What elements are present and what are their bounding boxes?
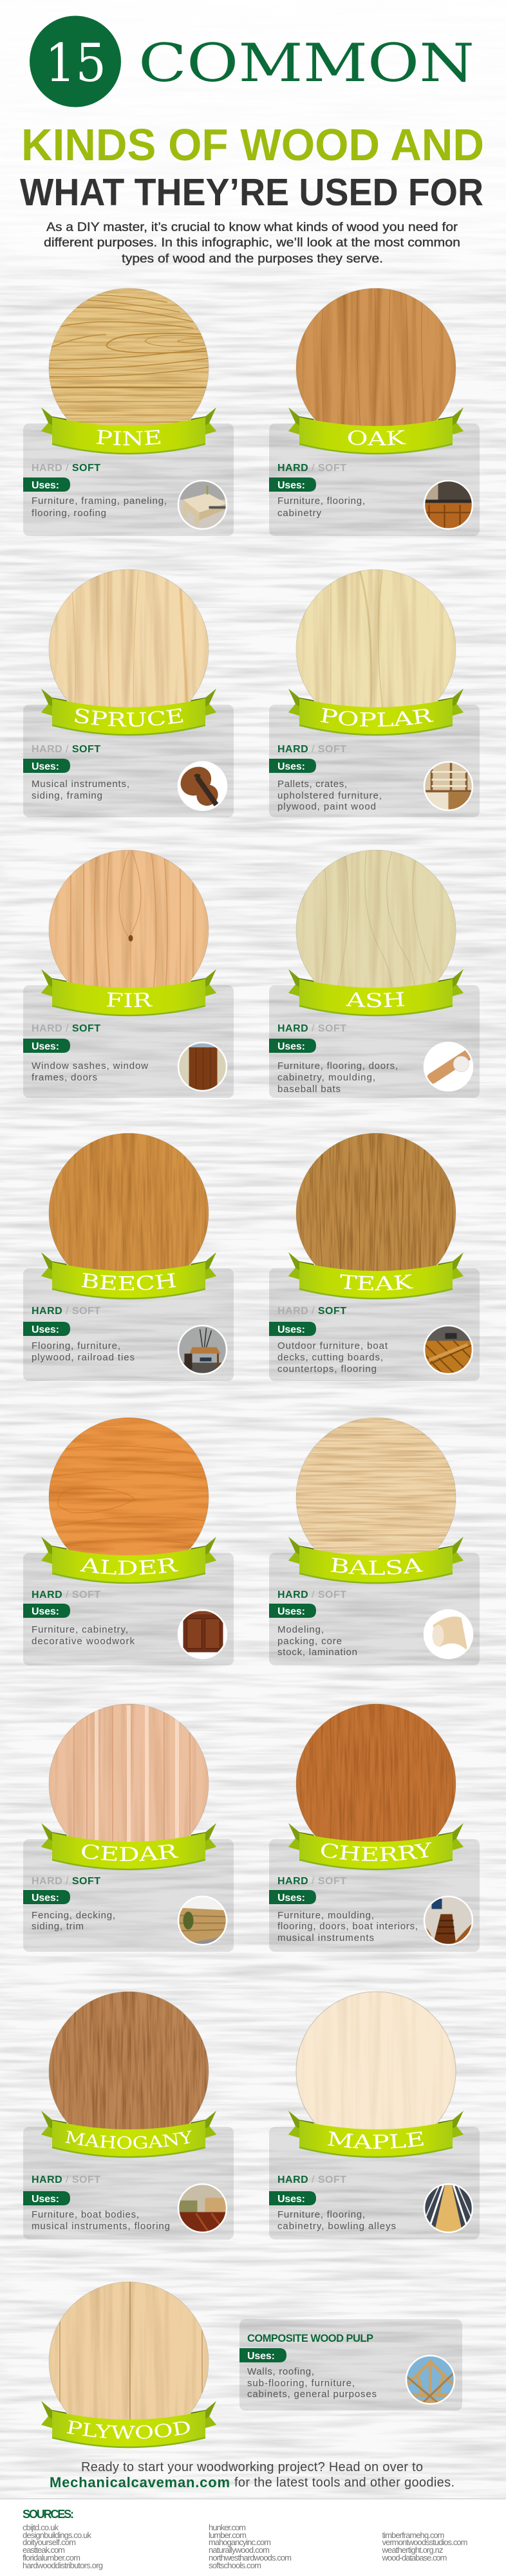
info panel: mahogany: musical instruments, flooring [32,2221,170,2232]
ribbon label: pine [52,417,206,454]
info panel: fir: Window sashes, window [32,1061,148,1071]
ribbon label: fir [52,979,205,1015]
info panel: balsa: stock, lamination [277,1647,357,1658]
card: beech [23,1133,234,1381]
thumbnail: mahogany room [178,2184,227,2233]
info panel: alder: Uses: [32,1606,59,1617]
info panel: poplar: Uses: [277,761,305,772]
thumbnail: cabinet [178,1610,227,1659]
info panel: spruce: Musical instruments, [32,779,129,790]
ribbon label: oak [299,417,453,454]
info panel: maple: Uses: [277,2194,305,2205]
wood disc: pine [49,288,209,426]
info panel: oak [269,423,480,536]
ribbon tails: ash [288,969,464,996]
info panel: fir [23,985,234,1098]
info panel: cherry: Furniture, moulding, [277,1910,374,1921]
thumbnail: crates [424,762,473,811]
sources column 2: softschools.com [209,2561,261,2570]
ribbon label: alder [52,1546,205,1583]
ribbon label: plywood: PLYWOOD [67,2420,190,2439]
info panel: poplar: HARD / SOFT [277,744,346,755]
info panel: oak: Furniture, flooring, [277,496,365,506]
info panel: cedar [23,1839,234,1952]
panel: composite wood pulp: sub-flooring, furniture, [247,2378,355,2389]
card: pine [23,288,234,536]
title number badge: 15 [45,33,106,94]
ribbon label: maple [299,2120,453,2157]
ribbon tails: teak [288,1252,464,1279]
ribbon tails: plywood [41,2401,216,2428]
sources heading: SOURCES: [23,2508,74,2521]
title line: what they're used for: WHAT THEY’RE USED FOR [20,171,483,214]
info panel: balsa [269,1553,480,1665]
wood disc: spruce [49,569,209,707]
info panel: spruce: siding, framing [32,790,102,801]
info panel: spruce: Uses: [32,761,59,772]
info panel: maple: HARD / SOFT [277,2174,346,2185]
info panel: ash [269,985,480,1098]
info panel: cherry [269,1839,480,1952]
ribbon tails: fir [41,969,216,996]
ribbon label: alder: ALDER [80,1558,178,1575]
info panel: pine: flooring, roofing [32,508,106,519]
ribbon tails: maple [288,2111,464,2138]
sources column 2: hunker.com [209,2523,246,2532]
thumbnail: dining table [178,1326,227,1375]
card: cherry [269,1704,480,1952]
sources column 1: cbijtd.co.uk [23,2523,59,2532]
ribbon label: spruce [52,698,206,736]
sources column 2: mahogancyinc.com [209,2537,271,2547]
thumbnail: veneer roll [424,1610,473,1659]
thumbnail: cedar fence [178,1896,227,1945]
sources column 2: lumber.com [209,2530,247,2540]
info panel: beech: plywood, railroad ties [32,1352,135,1363]
info panel: fir: Uses: [32,1041,59,1052]
ribbon label: mahogany: MAHOGANY [65,2130,192,2149]
info panel: teak: decks, cutting boards, [277,1352,383,1363]
uses pill: composite: Uses: [247,2351,275,2362]
info panel: balsa: packing, core [277,1636,342,1647]
thumbnail: coffee table [178,480,227,529]
ribbon label: cedar: CEDAR [82,1844,179,1861]
uses pill: composite [239,2348,286,2362]
info panel: teak: Uses: [277,1324,305,1335]
wood disc: cherry [296,1704,456,1866]
info panel: spruce: HARD / SOFT [32,744,100,755]
info panel: beech: Uses: [32,1324,59,1335]
thumbnail: bowling alley [424,2184,473,2233]
info panel: ash: HARD / SOFT [277,1023,346,1034]
title line: kinds of wood and: KINDS OF WOOD AND [21,120,484,170]
sources column 3: timberframehq.com [382,2530,444,2540]
title [20,15,484,214]
wood disc: beech [49,1133,209,1293]
ribbon label: ash [299,979,453,1015]
info panel: balsa: HARD / SOFT [277,1589,346,1600]
panel: composite wood pulp: cabinets, general purposes [247,2389,377,2400]
ribbon tails: poplar [288,689,464,716]
info panel: beech [23,1268,234,1381]
card: poplar [269,569,480,817]
card: mahogany [23,1992,234,2239]
ribbon label: teak [299,1262,453,1299]
ribbon label: cedar [52,1833,205,1869]
card: ash [269,849,480,1098]
wood disc: oak [296,288,456,426]
info panel: cherry: musical instruments [277,1932,374,1943]
info panel: poplar [269,705,480,817]
call to action: Ready to start your woodworking project? Head on over to [81,2460,423,2474]
info panel: pine: Uses: [32,480,59,491]
info panel: teak: countertops, flooring [277,1364,377,1375]
ribbon tails: balsa [288,1537,464,1564]
sources column 3: vermontwoodsstudios.com [382,2537,467,2547]
card: oak [269,288,480,536]
ribbon label: balsa: BALSA [331,1557,424,1575]
wood disc: fir [49,849,209,988]
info panel: alder [23,1553,234,1665]
footer: sources [0,2498,506,2576]
info panel: mahogany: HARD / SOFT [32,2174,100,2185]
ribbon label: cherry [299,1833,453,1869]
ribbon label: ash: ASH [346,992,404,1008]
info panel: cherry: flooring, doors, boat interiors, [277,1921,418,1932]
sources column 3: wood-database.com [381,2553,447,2562]
ribbon label: poplar: POPLAR [321,708,434,727]
knot [129,935,133,941]
ribbon label: maple: MAPLE [328,2131,424,2149]
thumbnail: kitchen cabinets [424,480,473,530]
card: cedar [23,1704,234,1952]
thumbnail: boat interior [424,1896,473,1945]
intro text: As a DIY master, it’s crucial to know what kinds of wood you need for [46,221,458,234]
info panel: mahogany: Uses: [32,2194,59,2205]
ribbon label: beech [52,1262,205,1299]
sources column 1: hardwooddistributors.org [23,2561,103,2570]
intro text [44,221,460,266]
ribbon label: spruce: SPRUCE [75,708,183,727]
wood disc: cedar [49,1704,209,1866]
info panel: maple [269,2127,480,2239]
card: balsa [269,1418,480,1665]
info panel: poplar: plywood, paint wood [277,801,376,812]
thumbnail: ukulele [178,761,228,811]
ribbon label: mahogany [52,2120,205,2157]
info panel: cherry: HARD / SOFT [277,1876,346,1887]
panel: composite wood pulp [239,2319,462,2411]
info panel: ash: baseball bats [277,1084,341,1095]
intro text: different purposes. In this infographic, we’ll look at the most common [44,236,460,250]
ribbon tails: oak [288,407,464,434]
info panel: fir: frames, doors [32,1072,97,1083]
info panel: cedar: HARD / SOFT [32,1876,100,1887]
info panel: oak: Uses: [277,480,305,491]
sources column 3 [381,2530,467,2562]
sources column 1: eastteak.com [23,2545,65,2555]
info panel: ash: Uses: [277,1041,305,1052]
thumbnail: baseball bat and ball [424,1042,473,1091]
thumbnail: teak deck [424,1326,473,1375]
wood disc: plywood [49,2282,209,2444]
info panel: beech: Flooring, furniture, [32,1340,120,1351]
sources column 2 [209,2523,292,2570]
wood disc: balsa [296,1418,460,1577]
sources column 1: designbuildings.co.uk [23,2530,91,2540]
ribbon tails: mahogany [41,2111,216,2138]
info panel: teak: HARD / SOFT [277,1306,346,1317]
ribbon tails: beech [41,1252,216,1279]
wood disc: teak [296,1133,456,1295]
panel: composite wood pulp: Walls, roofing, [247,2366,314,2377]
sources column 1: doityourself.com [23,2537,76,2547]
info panel: mahogany: Furniture, boat bodies, [32,2209,139,2220]
thumbnail: door [178,1042,227,1091]
ribbon label: beech: BEECH [81,1273,176,1290]
thumbnail: roof trusses [406,2355,454,2404]
info panel: cedar: siding, trim [32,1921,84,1932]
info panel: alder: HARD / SOFT [32,1589,100,1600]
info panel: pine: Furniture, framing, paneling, [32,496,167,506]
panel heading: composite wood pulp: COMPOSITE WOOD PULP [247,2333,373,2344]
ribbon label: fir: FIR [107,992,153,1007]
ribbon label: teak: TEAK [340,1274,413,1291]
ribbon tails: spruce [41,689,216,716]
sources column 1 [23,2523,103,2570]
card: plywood [41,2282,216,2447]
call to action [50,2460,454,2490]
info panel: balsa: Modeling, [277,1624,324,1635]
info panel: teak [269,1268,480,1381]
ribbon tails: alder [41,1537,216,1564]
info panel: alder: Furniture, cabinetry, [32,1624,128,1635]
title word: common: COMMON [138,33,474,94]
ribbon label: plywood [52,2411,205,2447]
wood disc: maple [296,1992,456,2151]
info panel: poplar: Pallets, crates, [277,779,347,790]
ribbon tails: cherry [288,1823,464,1850]
ribbon tails: pine [41,407,216,434]
info panel: pine: HARD / SOFT [32,463,100,474]
ribbon label: oak: OAK [348,430,406,445]
wood disc: ash [296,849,456,988]
wood disc: mahogany [49,1992,209,2151]
sources column 2: northwesthardwoods.com [209,2553,292,2562]
info panel: cherry: Uses: [277,1893,305,1904]
sources column 3: weathertight.org.nz [381,2545,443,2555]
call to action: for the latest tools and other goodies. [234,2476,454,2490]
sources column 1: floridalumber.com [23,2553,80,2562]
info panel: ash: cabinetry, moulding, [277,1072,375,1083]
info panel: spruce [23,705,234,820]
title number badge [30,15,121,107]
ribbon label: balsa [299,1546,453,1583]
info panel: cedar: Uses: [32,1893,59,1904]
info panel: ash: Furniture, flooring, doors, [277,1061,398,1071]
info panel: balsa: Uses: [277,1606,305,1617]
card: fir [23,849,234,1098]
info panel: oak: cabinetry [277,508,322,519]
card: spruce [23,569,234,817]
info panel: fir: HARD / SOFT [32,1023,100,1034]
sources column 2: naturallywood.com [209,2545,270,2555]
wood disc: alder [49,1418,212,1577]
call to action link: Mechanicalcaveman.com [50,2474,230,2490]
info panel: teak: Outdoor furniture, boat [277,1340,388,1351]
info panel: alder: decorative woodwork [32,1636,135,1647]
ribbon label: cherry: CHERRY [321,1842,431,1861]
card: alder [23,1418,234,1665]
intro text: types of wood and the purposes they serve. [122,252,383,266]
card: teak [269,1133,480,1381]
info panel: maple: cabinetry, bowling alleys [277,2221,396,2232]
info panel: pine [23,423,234,536]
card: maple [269,1992,480,2239]
info panel: mahogany [23,2127,234,2239]
info panel: oak: HARD / SOFT [277,463,346,474]
info panel: maple: Furniture, flooring, [277,2209,365,2220]
ribbon label: poplar [299,698,453,735]
info panel: cedar: Fencing, decking, [32,1910,115,1921]
info panel: poplar: upholstered furniture, [277,790,382,801]
ribbon tails: cedar [41,1823,216,1850]
info panel: beech: HARD / SOFT [32,1306,100,1317]
wood disc: poplar [296,569,456,707]
ribbon label: pine: PINE [97,430,161,445]
